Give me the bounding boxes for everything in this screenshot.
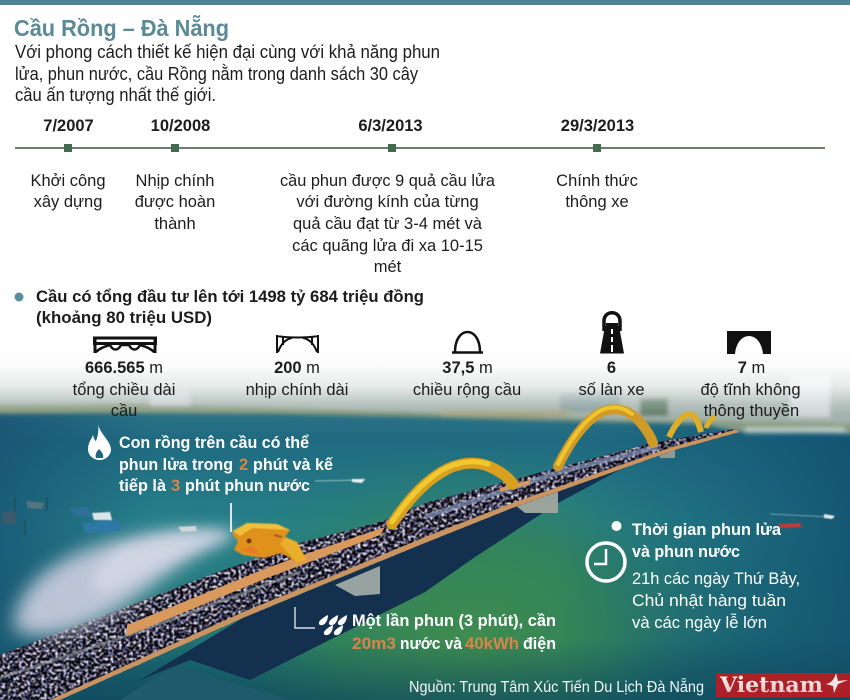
timeline event: 29/3/2013 [556,117,638,211]
white fade into the page [0,345,850,415]
timeline event: 7/2007 [30,117,106,211]
orange centre walkway [127,527,385,636]
bridge shadow on the water [140,432,740,680]
investment bullet text: (khoảng 80 triệu USD) [36,309,212,327]
intro text: lửa, phun nước, cầu Rồng nằm trong danh sách 30 cây [15,63,418,84]
intro text: Với phong cách thiết kế hiện đại cùng với khả năng phun [15,42,440,62]
river water [0,405,850,700]
timeline event: 29/3/2013: 29/3/2013 [561,117,634,135]
callout: dragon breathes fire: phun lửa trong [119,456,233,474]
timeline event: 6/3/2013: 6/3/2013 [358,117,423,135]
lavender road band [425,447,658,517]
stat: total length: cầu [111,402,137,420]
callout: water and power use: điện [523,635,556,653]
timeline event: 10/2008: 10/2008 [151,117,210,135]
stat: navigation clearance [700,331,800,420]
stat: total length: 666.565 m [85,359,163,377]
icon: arch [452,332,483,352]
stat: main span: nhịp chính dài [246,381,348,399]
stat: bridge width: 37,5 m [442,359,493,377]
stat: total length [73,338,175,420]
stat: lanes: số làn xe [578,381,645,399]
stat: total length: tổng chiều dài [73,381,175,399]
callout: show times: và các ngày lễ lớn [632,613,767,632]
timeline event: 10/2008: Nhịp chính [136,172,214,190]
water spray from dragon mouth [14,531,232,635]
callout: dragon breathes fire: 2 [239,456,248,474]
timeline event: 6/3/2013: mét [374,258,402,276]
icon: clock [587,543,625,581]
dragon arch 3 [669,414,701,437]
logo: Vietnam+: Vietnam [719,672,823,697]
timeline event: 7/2007: Khởi công [30,172,106,190]
timeline event: 10/2008: được hoàn [135,193,215,211]
timeline event: 10/2008 [135,117,215,233]
callout: dragon breathes fire: phút phun nước [185,477,310,495]
timeline event: 10/2008: thành [154,215,196,233]
boats [2,479,835,535]
timeline event: 6/3/2013: các quãng lửa đi xa 10-15 [292,237,483,255]
source: Nguồn: Trung Tâm Xúc Tiến Du Lịch Đà Nẵng [409,677,704,696]
investment bullet text [14,288,424,327]
callout: dragon breathes fire: 3 [171,477,180,495]
callout: water and power use: nước và [400,635,463,653]
title: Cầu Rồng – Đà Nẵng [14,14,229,41]
callout: show times: và phun nước [632,543,740,561]
top band [0,0,850,5]
stat: lanes: 6 [607,359,616,377]
timeline event: 6/3/2013: với đường kính của từng [296,193,479,211]
timeline [15,117,825,276]
dragon arch 4 [706,417,716,428]
icon: bridge [94,338,156,353]
intro text [15,42,440,105]
investment bullet text: Cầu có tổng đầu tư lên tới 1498 tỷ 684 triệu đồng [36,288,424,306]
callout: show times [587,521,800,632]
stat: bridge width: chiều rộng cầu [413,381,521,399]
city skyline [0,350,850,434]
callout: water and power use: 20m3 [352,635,396,653]
callout: water and power use: 40kWh [465,635,519,653]
callout: dragon breathes fire: Con rồng trên cầu có thể [119,434,309,452]
icon: road in tunnel [600,313,624,354]
stat: lanes [578,313,645,399]
stat: main span [246,335,348,399]
icon: water drops [319,615,347,635]
callout: show times: Thời gian phun lửa [632,521,782,539]
icon: arch span [277,335,318,353]
timeline event: 7/2007: 7/2007 [43,117,94,135]
callout: water and power use [295,607,556,653]
callout: dragon breathes fire: tiếp là [119,477,167,495]
stat: navigation clearance: thông thuyền [704,402,799,420]
stat: navigation clearance: độ tĩnh không [700,381,800,399]
bridge piers [335,448,675,596]
dragon head [233,523,307,563]
callout: water and power use: Một lần phun (3 phút), cần [352,612,556,630]
photo: Dragon Bridge over the river [0,345,850,700]
callout: dragon breathes fire [88,424,334,532]
dragon arch 2 [558,407,653,466]
timeline event: 6/3/2013: cầu phun được 9 quả cầu lửa [280,172,496,190]
callout: dragon breathes fire: phút và kế [253,456,334,474]
icon: flame [88,424,111,460]
timeline event: 6/3/2013 [280,117,496,276]
timeline event: 29/3/2013: thông xe [565,193,629,211]
deck outer rim [50,429,740,700]
stat: navigation clearance: 7 m [738,359,765,377]
teal wedge under the bridge [120,665,290,700]
callout: show times: 21h các ngày Thứ Bảy, [632,570,800,588]
icon: tunnel block [727,331,771,354]
dragon arch 1 [392,462,513,524]
callout: show times: Chủ nhật hàng tuần [632,592,786,610]
timeline event: 7/2007: xây dựng [34,193,102,211]
stat: bridge width [413,332,521,399]
intro text: cầu ấn tượng nhất thế giới. [15,85,216,105]
timeline event: 6/3/2013: quả cầu đạt từ 3-4 mét và [293,215,483,233]
timeline event: 29/3/2013: Chính thức [556,172,638,190]
bridge deck [0,420,750,700]
stat: main span: 200 m [274,359,320,377]
